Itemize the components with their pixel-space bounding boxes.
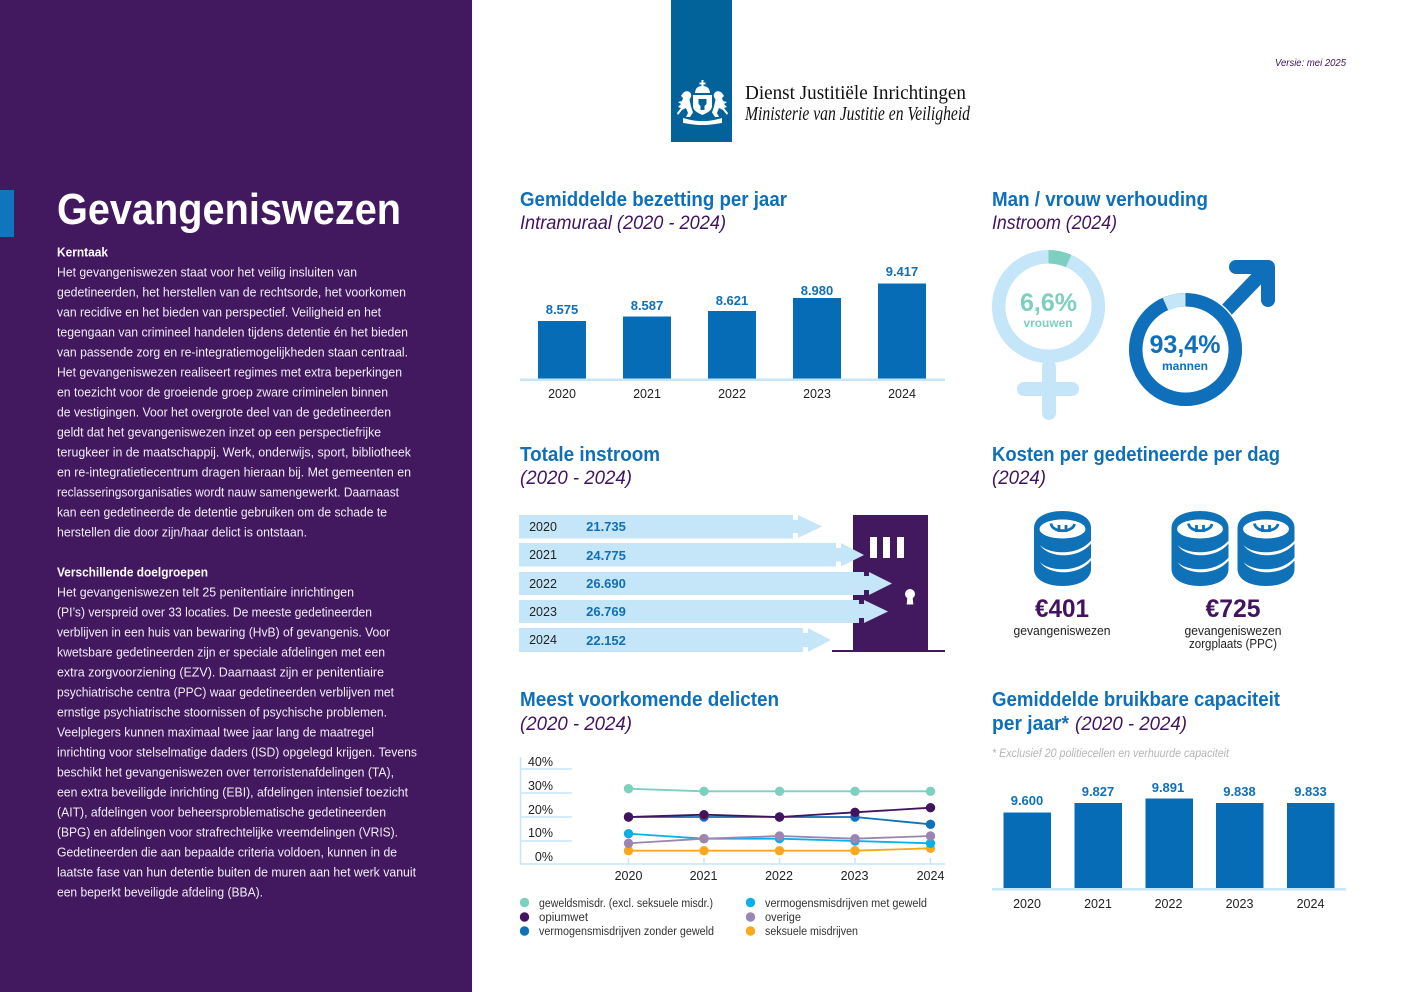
cost: 725: zorgplaats (PPC)	[1189, 637, 1277, 651]
legend: vermogensmisdrijven met geweld	[765, 898, 927, 910]
icon: male symbol	[1128, 267, 1268, 408]
line chart: delicten: 2022	[765, 869, 793, 883]
text block: verschillende doelgroepen: beschikt het gevangeniswezen over terroristenafdelingen (TA),	[57, 766, 394, 780]
bar chart: capaciteit: 9.600	[1011, 793, 1043, 808]
cost: 401: gevangeniswezen	[1014, 624, 1111, 638]
accent tab	[0, 190, 14, 237]
arrows: instroom per jaar	[519, 515, 892, 652]
arrow labels: 2023	[529, 605, 557, 619]
bar chart: bezetting: 2023	[803, 387, 831, 401]
text block: verschillende doelgroepen: (AIT), afdelingen voor beheersproblematische gedetineerden	[57, 806, 386, 820]
cost: 401: €401	[1035, 595, 1089, 623]
text block: kerntaak: en re-integratietiecentrum dragen hieraan bij. Met gemeenten en	[57, 466, 411, 480]
text block: kerntaak: tegengaan van crimineel handelen tijdens detentie én het bieden	[57, 326, 408, 340]
bar chart: bezetting: 8.575	[546, 302, 578, 317]
text block: kerntaak: terugkeer in de maatschappij. Werk, onderwijs, sport, bibliotheek	[57, 446, 412, 460]
text block: kerntaak: Kerntaak	[57, 246, 108, 260]
bar chart: capaciteit: 9.833	[1294, 784, 1327, 799]
icon: coin stack 725 left	[1172, 511, 1229, 586]
heading: Gemiddelde bezetting per jaar	[520, 189, 787, 211]
legend: vermogensmisdrijven zonder geweld	[539, 926, 714, 938]
line chart: delicten: 20%	[528, 803, 553, 817]
legend: opiumwet	[539, 912, 589, 924]
subheading: Intramuraal (2020 - 2024)	[520, 213, 726, 234]
arrow labels: 26.769	[586, 604, 626, 619]
icon: female symbol	[999, 257, 1098, 420]
arrow labels: 26.690	[586, 576, 626, 591]
line chart: delicten: 40%	[528, 755, 553, 769]
icon: prison door	[832, 515, 945, 652]
line chart: delicten: 2023	[841, 869, 868, 883]
panel: bruikbare capaciteit	[992, 689, 1346, 911]
version note: Versie: mei 2025	[1275, 57, 1346, 69]
panel: totale instroom	[519, 444, 945, 652]
icon: female symbol: 6,6%	[1020, 289, 1077, 317]
text block: verschillende doelgroepen: Veelplegers kunnen maximaal twee jaar lang de maatregel	[57, 726, 374, 740]
heading: Meest voorkomende delicten	[520, 689, 779, 711]
panel: left introduction	[0, 0, 472, 992]
text block: kerntaak: herstellen die door zijn/haar delict is ontstaan.	[57, 526, 307, 540]
bar chart: bezetting: 2020	[548, 387, 576, 401]
title: Gevangeniswezen	[57, 185, 401, 234]
arrow labels: 2024	[529, 633, 557, 647]
line chart: delicten: 2020	[615, 869, 642, 883]
subheading: (2024)	[992, 468, 1046, 489]
text block: kerntaak: geldt dat het gevangeniswezen inzet op een perspectiefrijke	[57, 426, 381, 440]
text block: kerntaak	[57, 246, 412, 540]
arrow labels: 21.735	[586, 519, 626, 534]
bar chart: capaciteit: 9.838	[1223, 784, 1256, 799]
text block: verschillende doelgroepen: (BPG) en afdelingen voor strafrechtelijke vreemdelingen (VRIS).	[57, 826, 398, 840]
bar chart: capaciteit: 2021	[1084, 897, 1112, 911]
text block: verschillende doelgroepen: laatste fase van hun detentie buiten de muren aan het werk vanuit	[57, 866, 417, 880]
text block: verschillende doelgroepen	[57, 566, 417, 900]
icon: coin stack 725 right	[1238, 511, 1295, 586]
bar chart: bezetting: 2022	[718, 387, 746, 401]
arrow labels: 22.152	[586, 633, 626, 648]
subheading: Instroom (2024)	[992, 213, 1117, 234]
text block: verschillende doelgroepen: Gedetineerden die aan bepaalde criteria voldoen, kunnen in de	[57, 846, 397, 860]
logo text: Dienst Justitiële Inrichtingen	[745, 83, 966, 104]
panel: gemiddelde bezetting	[520, 189, 945, 401]
panel: man vrouw verhouding	[992, 189, 1268, 420]
cost: 725: €725	[1206, 595, 1261, 623]
text block: verschillende doelgroepen: een beperkt beveiligde afdeling (BBA).	[57, 886, 263, 900]
text block: verschillende doelgroepen: een extra beveiligde inrichting (EBI), afdelingen intensief toezicht	[57, 786, 409, 800]
bar chart: capaciteit: 9.891	[1152, 780, 1184, 795]
arrow labels	[529, 519, 626, 648]
bar chart: bezetting: 2024	[888, 387, 916, 401]
legend: geweldsmisdr. (excl. seksuele misdr.)	[539, 898, 713, 910]
text block: verschillende doelgroepen: inrichting voor stelselmatige daders (ISD) opgelegd krijgen. Tevens	[57, 746, 417, 760]
panel: kosten per gedetineerde	[992, 444, 1295, 651]
text block: verschillende doelgroepen: Verschillende doelgroepen	[57, 566, 208, 580]
heading: Totale instroom	[520, 444, 660, 466]
subheading: (2020 - 2024)	[520, 468, 632, 489]
line chart: delicten: 2021	[690, 869, 717, 883]
logo: rijksoverheid: Ministerie van Justitie en Veiligheid	[744, 104, 970, 125]
text block: kerntaak: reclasseringsorganisaties wordt nauw samengewerkt. Daarnaast	[57, 486, 400, 500]
heading: Gemiddelde bruikbare capaciteit	[992, 689, 1280, 711]
text block: verschillende doelgroepen: ernstige psychiatrische stoornissen of psychische problemen.	[57, 706, 387, 720]
text block: kerntaak: van passende zorg en re-integratiemogelijkheden staan centraal.	[57, 346, 408, 360]
text block: verschillende doelgroepen: kwetsbare gedetineerden zijn er speciale afdelingen met een	[57, 646, 385, 660]
bar chart: capaciteit: 2023	[1226, 897, 1253, 911]
icon: female symbol: vrouwen	[1024, 316, 1072, 330]
heading: Man / vrouw verhouding	[992, 189, 1208, 211]
footnote: * Exclusief 20 politiecellen en verhuurde capaciteit	[992, 746, 1230, 760]
line chart: delicten: 2024	[917, 869, 944, 883]
legend	[520, 898, 927, 938]
text block: verschillende doelgroepen: extra zorgvoorziening (EZV). Daarnaast zijn er penitentiaire	[57, 666, 384, 680]
icon: male symbol: 93,4%	[1150, 331, 1220, 359]
heading: Kosten per gedetineerde per dag	[992, 444, 1280, 466]
bar chart: bezetting: 8.587	[631, 298, 663, 313]
bar chart: bezetting: 9.417	[886, 264, 918, 279]
text block: verschillende doelgroepen: psychiatrische centra (PPC) waar gedetineerden verblijven met	[57, 686, 394, 700]
cost: 725: gevangeniswezen	[1184, 624, 1282, 638]
line chart: delicten: 30%	[528, 779, 553, 793]
subheading: (2020 - 2024)	[1075, 714, 1187, 735]
icon: coat of arms	[677, 80, 728, 125]
icon: coin stack 401	[1034, 511, 1092, 586]
panel: meest voorkomende delicten	[520, 689, 945, 938]
bar chart: bezetting	[520, 264, 945, 401]
bar chart: bezetting: 8.980	[801, 283, 833, 298]
text block: kerntaak: de vestigingen. Voor het overgrote deel van de gedetineerden	[57, 406, 391, 420]
line chart: delicten	[520, 755, 945, 883]
text block: verschillende doelgroepen: (PI’s) verspreid over 33 locaties. De meeste gedetineerden	[57, 606, 372, 620]
text block: verschillende doelgroepen: Het gevangeniswezen telt 25 penitentiaire inrichtingen	[57, 586, 354, 600]
legend: seksuele misdrijven	[765, 926, 858, 938]
logo: rijksoverheid	[671, 0, 970, 142]
cost: 401	[1014, 595, 1111, 638]
bar chart: capaciteit: 2022	[1155, 897, 1182, 911]
bar chart: bezetting: 2021	[633, 387, 661, 401]
arrow labels: 24.775	[586, 548, 626, 563]
bar chart: capaciteit: 2024	[1297, 897, 1324, 911]
line chart: delicten: 10%	[528, 826, 553, 840]
subheading: (2020 - 2024)	[520, 714, 632, 735]
cost: 725	[1184, 595, 1282, 651]
text block: kerntaak: en toezicht voor de groeiende groep zware criminelen binnen	[57, 386, 388, 400]
bar chart: capaciteit: 9.827	[1082, 784, 1114, 799]
text block: kerntaak: gedetineerden, het herstellen van de rechtsorde, het voorkomen	[57, 286, 406, 300]
line chart: delicten: 0%	[535, 850, 553, 864]
arrow labels: 2020	[529, 520, 557, 534]
bar chart: bezetting: 8.621	[716, 293, 748, 308]
text block: kerntaak: kan een gedetineerde de detentie gebruiken om de schade te	[57, 506, 387, 520]
text block: kerntaak: van recidive en het bieden van perspectief. Veiligheid en het	[57, 306, 382, 320]
bar chart: capaciteit	[992, 780, 1346, 911]
heading: per jaar*	[992, 713, 1069, 735]
legend: overige	[765, 912, 801, 924]
text block: verschillende doelgroepen: verblijven in een huis van bewaring (HvB) of gevangenis. Voor	[57, 626, 390, 640]
heading	[992, 689, 1280, 735]
arrow labels: 2021	[529, 548, 557, 562]
text block: kerntaak: Het gevangeniswezen realiseert regimes met extra beperkingen	[57, 366, 402, 380]
bar chart: capaciteit: 2020	[1013, 897, 1041, 911]
arrow labels: 2022	[529, 577, 557, 591]
icon: male symbol: mannen	[1162, 359, 1208, 373]
text block: kerntaak: Het gevangeniswezen staat voor het veilig insluiten van	[57, 266, 357, 280]
